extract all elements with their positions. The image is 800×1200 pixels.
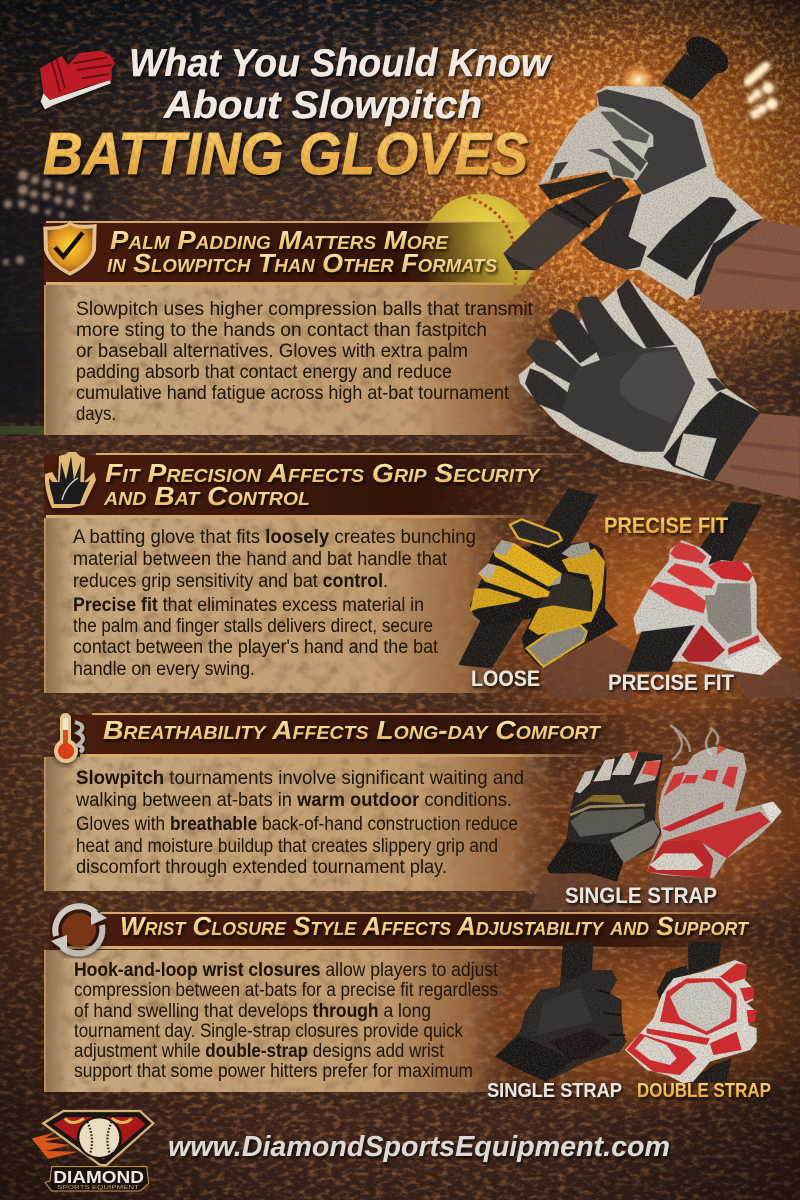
logo flames — [22, 1132, 78, 1159]
title: About Slowpitch — [163, 84, 482, 127]
title — [43, 42, 553, 187]
heading: Wrist Closure Style Affects Adjustability and Support — [120, 911, 750, 941]
icon: cycle arrows — [51, 906, 107, 954]
body text: walking between at-bats in warm outdoor conditions. — [75, 790, 512, 811]
body text: contact between the player's hand and the bat — [73, 637, 439, 658]
logo wordmark — [45, 1167, 149, 1191]
logo diamond badge — [43, 1111, 153, 1165]
body text: Hook-and-loop wrist closures allow players to adjust — [74, 960, 499, 981]
icon: hand — [45, 452, 96, 508]
body text: Precise fit that eliminates excess material in — [73, 595, 424, 616]
label: double strap: DOUBLE STRAP — [637, 1080, 771, 1102]
body text — [75, 768, 524, 878]
icon: red batting glove — [40, 51, 115, 109]
heading: and Bat Control — [103, 481, 310, 511]
header band — [44, 713, 640, 891]
panel: wrist closure — [44, 906, 775, 1092]
panel: breathability — [44, 713, 640, 891]
label: precise fit white: PRECISE FIT — [608, 670, 735, 695]
icon: shield with check — [43, 220, 97, 276]
heading — [103, 458, 541, 511]
panel background — [44, 285, 554, 435]
title: What You Should Know — [129, 42, 553, 85]
softball — [422, 194, 536, 308]
heading: Palm Padding Matters More — [110, 225, 449, 255]
logo: Diamond — [22, 1111, 153, 1191]
stadium lights — [3, 64, 778, 265]
body text — [74, 960, 499, 1082]
body text: or baseball alternatives. Gloves with extra palm — [76, 341, 468, 362]
body text: A batting glove that fits loosely creates bunching — [73, 527, 476, 548]
label: single strap: SINGLE STRAP — [487, 1080, 622, 1102]
body text: padding absorb that contact energy and reduce — [76, 362, 452, 383]
label: precise fit gold: PRECISE FIT — [604, 513, 729, 538]
title: BATTING GLOVES — [43, 121, 528, 187]
header band — [44, 912, 775, 1092]
body text: Slowpitch tournaments involve significant waiting and — [76, 768, 524, 789]
heading — [107, 225, 497, 278]
glove: gripping bat (top right) — [503, 30, 800, 310]
body text: tournament day. Single-strap closures provide quick — [74, 1021, 463, 1042]
glove: red double strap on bat — [625, 942, 757, 1083]
body text: heat and moisture buildup that creates slippery grip and — [76, 836, 498, 857]
heading: Fit Precision Affects Grip Security — [105, 458, 541, 488]
logo wordmark: DIAMOND — [53, 1167, 144, 1187]
label: loose: LOOSE — [471, 666, 540, 691]
logo wordmark: SPORTS EQUIPMENT — [57, 1185, 140, 1191]
body text: Gloves with breathable back-of-hand construction reduce — [76, 814, 518, 835]
body text — [76, 299, 534, 425]
logo ball — [77, 1116, 122, 1159]
panel background — [44, 518, 514, 693]
panel: palm padding — [43, 220, 554, 435]
panel: fit precision — [44, 452, 596, 693]
glove: precise red fit on bat — [627, 502, 800, 698]
body text: cumulative hand fatigue across high at-bat tournament — [76, 383, 510, 404]
body text: adjustment while double-strap designs add wrist — [74, 1041, 445, 1062]
glove: red breathable glove — [643, 745, 782, 910]
body text: material between the hand and bat handle that — [73, 549, 448, 570]
panel background — [44, 757, 564, 891]
glove: open palm — [518, 278, 800, 500]
body text: the palm and finger stalls delivers direct, secure — [73, 616, 433, 637]
website url: www.DiamondSportsEquipment.com — [168, 1131, 670, 1163]
glove: dark breathable glove — [530, 751, 663, 910]
body text: Slowpitch uses higher compression balls that transmit — [76, 299, 534, 320]
glove: black single strap on bat — [495, 942, 627, 1082]
body text: more sting to the hands on contact than fastpitch — [76, 320, 487, 341]
icon: thermometer with heat waves — [54, 713, 83, 763]
body text: days. — [76, 404, 116, 425]
header band — [44, 453, 596, 693]
heading: Breathability Affects Long-day Comfort — [103, 715, 602, 745]
body text: discomfort through extended tournament play. — [76, 857, 447, 878]
heading: in Slowpitch Than Other Formats — [107, 248, 497, 278]
body text: of hand swelling that develops through a long — [74, 1001, 431, 1022]
body text: handle on every swing. — [73, 659, 255, 680]
header band — [44, 221, 536, 435]
label: single strap: SINGLE STRAP — [565, 883, 717, 908]
body text: compression between at-bats for a precise fit regardless — [74, 980, 498, 1001]
body text: reduces grip sensitivity and bat control. — [73, 571, 388, 592]
panel background — [44, 950, 514, 1092]
body text: support that some power hitters prefer for maximum — [74, 1061, 473, 1082]
steam — [670, 725, 718, 760]
glove: loose yellow fit on bat — [458, 488, 635, 698]
body text — [73, 527, 476, 680]
